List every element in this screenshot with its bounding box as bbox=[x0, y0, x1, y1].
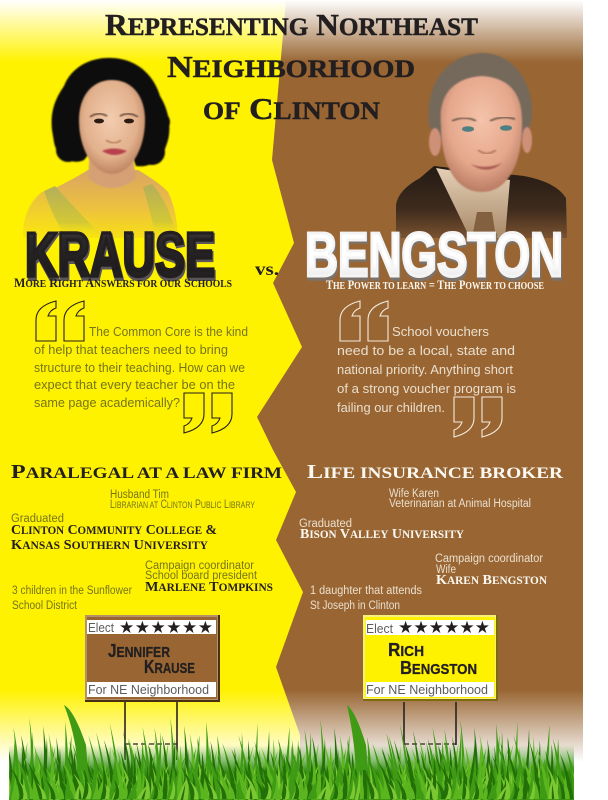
quote: Krause: of help that teachers need to bring bbox=[34, 342, 228, 357]
title: REPRESENTING NORTHEAST bbox=[105, 7, 478, 42]
portrait: Jennifer Krause bbox=[23, 58, 178, 238]
candidate name: Krause: KRAUSE bbox=[26, 221, 216, 293]
profile: Bengston: 1 daughter that attends bbox=[310, 585, 422, 597]
profile: Krause: LIBRARIAN AT CLINTON PUBLIC LIBRARY bbox=[110, 499, 255, 511]
profile: Krause: School District bbox=[12, 600, 78, 612]
profile: Bengston: Graduated bbox=[299, 518, 352, 530]
quote: Bengston: failing our children. bbox=[337, 400, 445, 415]
profile: Krause: CLINTON COMMUNITY COLLEGE & bbox=[11, 523, 217, 538]
tagline: Bengston: THE POWER TO LEARN = THE POWER TO CHOOSE bbox=[326, 278, 544, 292]
profile: Bengston: BISON VALLEY UNIVERSITY bbox=[300, 527, 464, 542]
profile: Bengston: Wife Karen bbox=[389, 488, 439, 500]
quote: Krause: same page academically? bbox=[34, 395, 180, 410]
yard sign: Jennifer Krause: JENNIFER bbox=[108, 641, 171, 661]
profile: Bengston: LIFE INSURANCE BROKER bbox=[307, 462, 564, 483]
quote: Krause bbox=[34, 301, 248, 433]
profile: Krause: Husband Tim bbox=[110, 489, 169, 501]
versus label: vs. bbox=[255, 259, 279, 279]
profile: Krause: Campaign coordinator bbox=[145, 560, 254, 572]
yard sign: Jennifer Krause: ★★★★★★ bbox=[119, 618, 213, 638]
title: NEIGHBORHOOD bbox=[167, 49, 415, 84]
portrait: Rich Bengston bbox=[396, 53, 567, 238]
yard sign: Rich Bengston: Elect bbox=[366, 621, 393, 636]
profile: Krause: PARALEGAL AT A LAW FIRM bbox=[11, 462, 282, 483]
profile: Bengston: KAREN BENGSTON bbox=[436, 573, 547, 588]
quote: Krause: expect that every teacher be on the bbox=[34, 377, 235, 392]
profile: Krause: KANSAS SOUTHERN UNIVERSITY bbox=[11, 538, 208, 553]
title bbox=[105, 7, 478, 126]
quote: Krause: The Common Core is the kind bbox=[89, 324, 248, 339]
profile: Krause bbox=[11, 462, 282, 612]
profile: Krause: 3 children in the Sunflower bbox=[12, 585, 132, 597]
yard sign: Rich Bengston: BENGSTON bbox=[400, 658, 477, 678]
profile: Bengston bbox=[299, 462, 564, 612]
profile: Krause: School board president bbox=[145, 570, 258, 582]
grass bbox=[0, 705, 580, 800]
quote: Bengston: need to be a local, state and bbox=[337, 343, 515, 358]
yard sign: Rich Bengston bbox=[363, 615, 498, 745]
title: OF CLINTON bbox=[203, 91, 380, 126]
yard sign: Jennifer Krause: For NE Neighborhood bbox=[88, 682, 209, 697]
quote: Bengston: School vouchers bbox=[392, 324, 489, 339]
profile: Krause: MARLENE TOMPKINS bbox=[145, 580, 273, 595]
profile: Bengston: Wife bbox=[436, 564, 456, 576]
tagline: Krause: MORE RIGHT ANSWERS FOR OUR SCHOOLS bbox=[14, 276, 232, 290]
candidate name: Krause: KRAUSE bbox=[25, 221, 215, 290]
yard sign: Rich Bengston: RICH bbox=[388, 640, 424, 660]
quote: Bengston: of a strong voucher program is bbox=[337, 381, 517, 396]
quote: Bengston: national priority. Anything short bbox=[337, 362, 513, 377]
yard sign: Jennifer Krause: KRAUSE bbox=[144, 657, 195, 677]
yard sign: Jennifer Krause bbox=[85, 615, 220, 760]
yard sign: Rich Bengston: For NE Neighborhood bbox=[366, 682, 488, 697]
yard sign: Jennifer Krause: Elect bbox=[88, 620, 114, 635]
profile: Krause: Graduated bbox=[11, 513, 64, 525]
profile: Bengston: Veterinarian at Animal Hospital bbox=[389, 498, 531, 510]
quote: Krause: structure to their teaching. How can we bbox=[34, 360, 245, 375]
yard sign: Rich Bengston: ★★★★★★ bbox=[398, 618, 490, 638]
profile: Bengston: Campaign coordinator bbox=[435, 553, 543, 565]
profile: Bengston: St Joseph in Clinton bbox=[310, 600, 400, 612]
quote: Bengston bbox=[337, 301, 517, 437]
